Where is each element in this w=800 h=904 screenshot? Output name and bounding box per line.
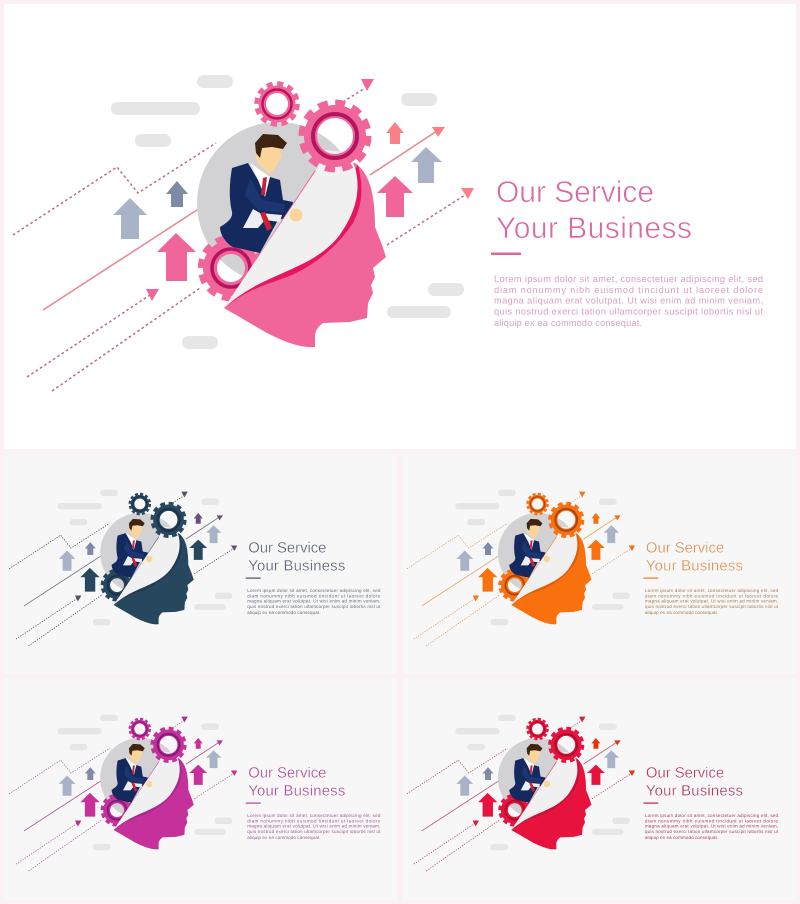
body text: diam nonummy nibh euismod tincidunt ut laoreet dolore [247,819,380,824]
body text: diam nonummy nibh euismod tincidunt ut laoreet dolore [494,285,763,295]
businessman [112,744,148,803]
small top gear [527,494,548,514]
title: Our Service [496,176,654,209]
background pills [111,75,464,349]
body text: quis nostrud exerci tation ullamcorper suscipit lobortis nisl ut [247,829,381,834]
title [496,176,692,245]
title: Your Business [248,557,345,574]
title [646,540,743,574]
body text: magna aliquam erat volutpat. Ut wisi enim ad minim veniam, [247,824,380,829]
large gear [550,728,583,761]
body text: aliquip ex ea commodo consequat. [645,610,718,615]
small top gear [256,84,298,124]
body text: magna aliquam erat volutpat. Ut wisi enim ad minim veniam, [494,296,763,306]
growth lines [407,492,635,646]
lower gear [500,570,530,600]
growth lines [9,492,237,646]
lower gear [500,795,530,825]
panel: orange slide [402,454,796,674]
body text [645,813,778,840]
body text: aliquip ex ea commodo consequat. [247,835,320,840]
small top gear [130,494,150,514]
grey circle [197,122,359,284]
growth lines [13,79,474,391]
body text: quis nostrud exerci tation ullamcorper suscipit lobortis nisl ut [247,604,381,609]
hand [146,781,152,787]
small top gear [527,719,548,739]
panel: pink main slide [4,4,796,449]
body text: quis nostrud exerci tation ullamcorper suscipit lobortis nisl ut [645,829,778,834]
background pills [58,715,232,850]
title rule [491,252,521,255]
hand [146,556,152,562]
body text: Lorem ipsum dolor sit amet, consectetuer adipiscing elit, sed [494,274,763,284]
large gear [152,728,185,761]
body text: Lorem ipsum dolor sit amet, consectetuer adipiscing elit, sed [247,588,380,593]
title: Our Service [646,765,724,781]
up arrows [59,513,221,592]
businessman [509,744,545,803]
body text: diam nonummy nibh euismod tincidunt ut laoreet dolore [645,594,778,599]
background pills [58,490,232,625]
body text: magna aliquam erat volutpat. Ut wisi enim ad minim veniam, [645,599,778,604]
panel: navy slide [4,454,398,674]
body text: magna aliquam erat volutpat. Ut wisi enim ad minim veniam, [645,824,778,829]
body text [247,813,381,840]
hand [544,781,550,787]
body text: quis nostrud exerci tation ullamcorper suscipit lobortis nisl ut [494,306,763,316]
title: Our Service [248,540,326,556]
lower gear [102,570,132,600]
title rule [643,802,658,804]
panel: red slide [402,679,796,900]
body text: diam nonummy nibh euismod tincidunt ut laoreet dolore [645,819,778,824]
lower gear [201,238,261,298]
title [248,540,345,574]
body text [247,588,381,615]
grey circle [100,738,180,818]
title: Our Service [248,765,326,781]
background pills [455,490,630,625]
up arrows [113,122,442,281]
panel: magenta slide [4,679,398,900]
body text: aliquip ex ea commodo consequat. [494,318,642,328]
head silhouette [114,527,194,624]
title: Your Business [646,557,743,574]
growth lines [9,717,237,871]
grey circle [498,513,578,593]
title rule [246,802,261,804]
body text: Lorem ipsum dolor sit amet, consectetuer adipiscing elit, sed [645,588,778,593]
hand [290,208,302,222]
up arrows [59,738,221,817]
growth lines [407,717,635,871]
body text: aliquip ex ea commodo consequat. [247,610,320,615]
body text: Lorem ipsum dolor sit amet, consectetuer adipiscing elit, sed [645,813,778,818]
small top gear [130,719,150,739]
body text: aliquip ex ea commodo consequat. [645,835,718,840]
title [646,765,743,799]
title: Our Service [646,540,724,556]
title: Your Business [248,782,345,799]
head silhouette [511,752,591,849]
grey circle [498,738,578,818]
title [248,765,345,799]
head silhouette [114,752,194,849]
body text: magna aliquam erat volutpat. Ut wisi enim ad minim veniam, [247,599,380,604]
up arrows [456,513,619,592]
businessman [220,134,293,253]
grey circle [100,513,180,593]
title rule [246,577,261,579]
large gear [550,503,583,536]
title rule [643,577,658,579]
body text [494,274,763,328]
businessman [509,519,545,578]
lower gear [102,795,132,825]
head silhouette [224,150,386,347]
large gear [302,102,368,170]
large gear [152,503,185,536]
background pills [455,715,630,850]
hand [544,556,550,562]
title: Your Business [646,782,743,799]
up arrows [456,738,619,817]
body text: Lorem ipsum dolor sit amet, consectetuer adipiscing elit, sed [247,813,380,818]
body text: diam nonummy nibh euismod tincidunt ut laoreet dolore [247,594,380,599]
body text [645,588,778,615]
head silhouette [511,527,591,624]
businessman [112,519,148,578]
title: Your Business [496,212,692,245]
body text: quis nostrud exerci tation ullamcorper suscipit lobortis nisl ut [645,604,778,609]
